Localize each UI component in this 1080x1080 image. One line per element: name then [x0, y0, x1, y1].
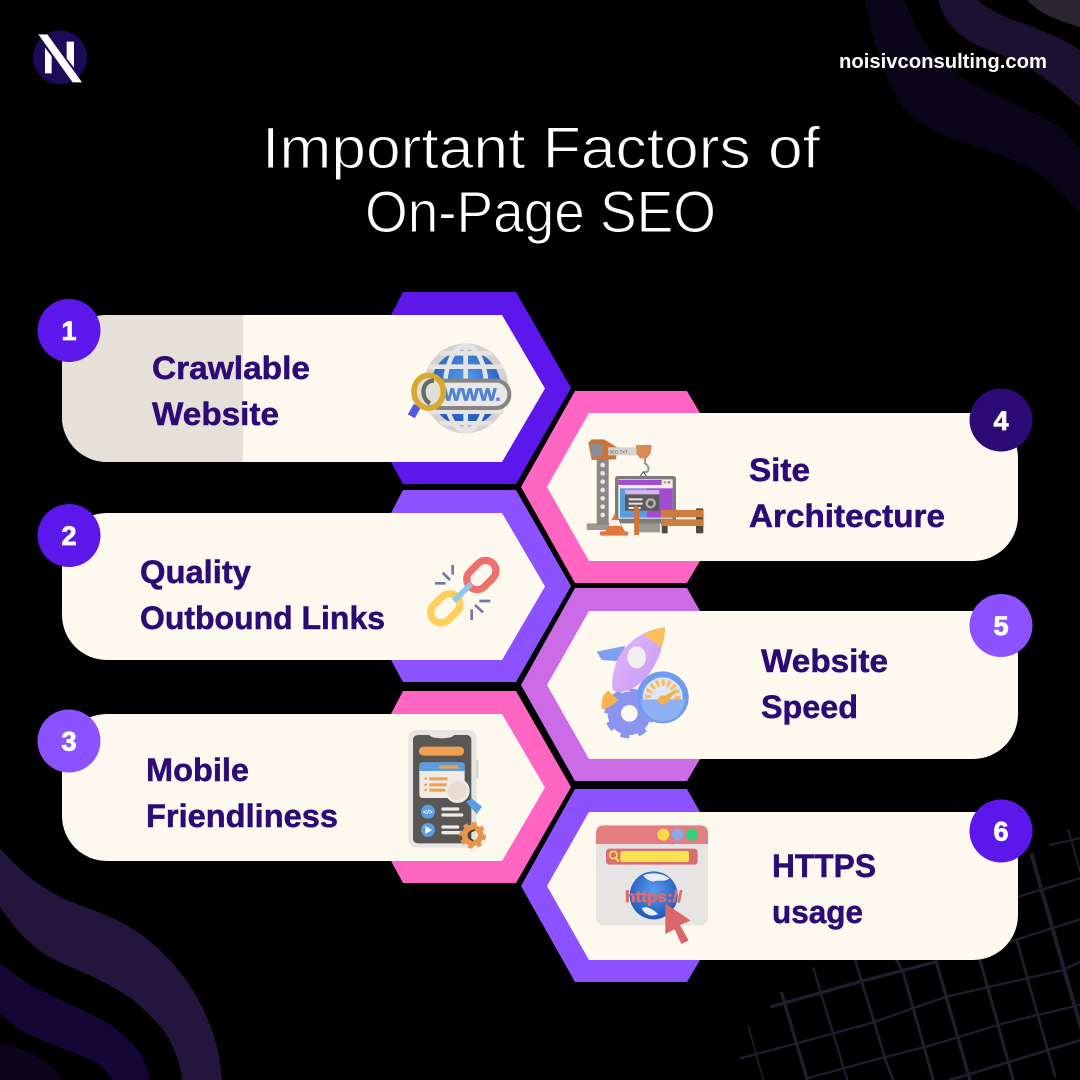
number badge 5	[970, 594, 1032, 657]
number badge 3: 3	[61, 726, 77, 756]
hexagon 3	[391, 691, 571, 883]
number badge 1	[38, 299, 100, 362]
icon: www globe: WWW.	[443, 385, 501, 405]
panel: mobile friendliness: Mobile	[146, 752, 249, 788]
hexagon 1	[391, 292, 571, 484]
number badge 6: 6	[993, 816, 1009, 846]
number badge 1: 1	[61, 316, 77, 346]
number badge 6	[970, 800, 1032, 862]
icon: https browser window	[596, 825, 708, 944]
panel: site architecture: Site	[749, 452, 810, 488]
number badge 2: 2	[61, 521, 77, 551]
icon: chain link	[426, 556, 500, 627]
icon: smartphone: </>	[423, 809, 433, 816]
icon: www globe	[411, 343, 509, 433]
title: On-Page SEO	[365, 180, 716, 245]
hexagon 6	[521, 789, 700, 982]
hexagon 5	[521, 588, 700, 781]
logo	[33, 30, 87, 84]
number badge 4	[970, 388, 1032, 452]
panel: website speed: Website	[761, 643, 888, 679]
icon: https browser window: https://	[625, 889, 683, 906]
panel: https usage: usage	[772, 894, 863, 930]
icon: smartphone	[408, 730, 484, 848]
hexagon 4	[521, 391, 700, 583]
panel: https usage: HTTPS	[772, 848, 876, 884]
icon: rocket with gauge and gear	[597, 627, 689, 736]
icon: construction crane with monitor: SEO.TXT	[609, 449, 628, 455]
background grid: bottom right	[740, 830, 1080, 1080]
hexagon 2	[391, 490, 571, 682]
panel: https usage	[521, 789, 1032, 982]
title: Important Factors of	[262, 116, 821, 181]
panel: mobile friendliness	[38, 691, 571, 883]
icon: construction crane with monitor	[587, 439, 704, 536]
panel: mobile friendliness: Friendliness	[146, 798, 338, 834]
panel: crawlable website	[38, 292, 571, 484]
number badge 5: 5	[993, 611, 1009, 641]
background waves: bottom left	[0, 848, 222, 1080]
panel: quality outbound links: Outbound Links	[140, 600, 385, 636]
panel: quality outbound links: Quality	[140, 554, 251, 590]
panel: website speed: Speed	[761, 689, 858, 725]
number badge 4: 4	[993, 406, 1009, 436]
panel: crawlable website: Website	[152, 396, 279, 432]
number badge 3	[38, 710, 100, 772]
panel: site architecture	[521, 388, 1032, 583]
panel: quality outbound links	[38, 490, 571, 682]
panel: crawlable website: Crawlable	[152, 350, 310, 386]
panel: website speed	[521, 588, 1032, 781]
title	[262, 116, 821, 245]
background waves: top right	[865, 0, 1080, 213]
number badge 2	[38, 504, 100, 567]
panel: site architecture: Architecture	[749, 498, 945, 534]
website url: noisivconsulting.com	[839, 50, 1047, 73]
